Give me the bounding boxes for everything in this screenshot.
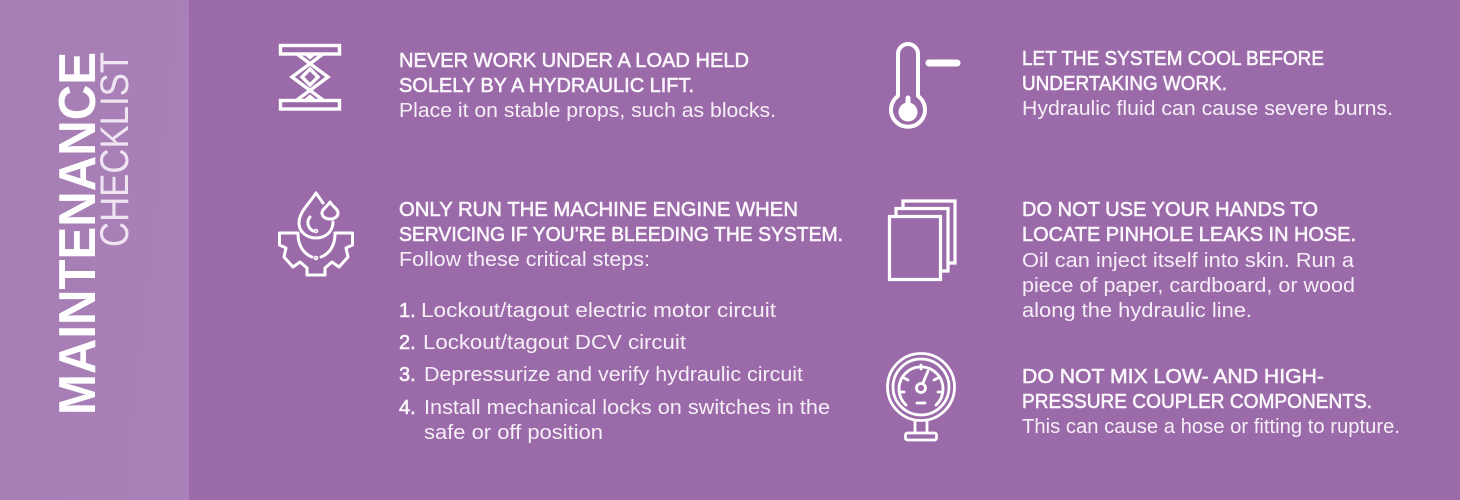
item: do not use hands: LOCATE PINHOLE LEAKS IN HOSE. bbox=[1022, 224, 1356, 246]
panel: sidebar bbox=[0, 0, 189, 500]
item: do not mix couplers: PRESSURE COUPLER COMPONENTS. bbox=[1022, 391, 1372, 413]
numbered list: 2. bbox=[399, 332, 416, 354]
numbered list: 4. bbox=[399, 397, 416, 419]
icon: paper sheets bbox=[890, 201, 955, 280]
item: only run the engine: SERVICING IF YOU’RE BLEEDING THE SYSTEM. bbox=[399, 224, 843, 246]
icon: thermometer bbox=[891, 44, 957, 127]
numbered list: 1. bbox=[399, 300, 416, 322]
item: let the system cool: UNDERTAKING WORK. bbox=[1022, 73, 1227, 95]
icon: pressure gauge bbox=[888, 354, 954, 440]
numbered list bbox=[399, 300, 830, 444]
item: only run the engine bbox=[280, 193, 843, 444]
numbered list: Lockout/tagout electric motor circuit bbox=[421, 300, 776, 322]
icon: oil drop and gear bbox=[280, 193, 352, 275]
subtitle: checklist: CHECKLIST bbox=[93, 52, 137, 247]
item: do not use hands: Oil can inject itself into skin. Run a bbox=[1022, 250, 1355, 272]
item: do not use hands: along the hydraulic line. bbox=[1022, 300, 1252, 322]
numbered list: Install mechanical locks on switches in the bbox=[424, 397, 830, 419]
item: do not mix couplers: This can cause a hose or fitting to rupture. bbox=[1022, 416, 1400, 438]
item: only run the engine: Follow these critical steps: bbox=[399, 249, 650, 271]
text: couplers heading: DO NOT MIX LOW- AND HIGH- bbox=[1022, 366, 1324, 388]
item: let the system cool bbox=[891, 44, 1393, 127]
numbered list: safe or off position bbox=[424, 422, 603, 444]
item: never work under a load bbox=[280, 46, 776, 122]
item: let the system cool: Hydraulic fluid can cause severe burns. bbox=[1022, 98, 1393, 120]
numbered list: 3. bbox=[399, 364, 416, 386]
text: hands heading: DO NOT USE YOUR HANDS TO bbox=[1022, 199, 1318, 221]
numbered list: Lockout/tagout DCV circuit bbox=[423, 332, 686, 354]
icon: hourglass props bbox=[280, 46, 340, 109]
text: cool heading: LET THE SYSTEM COOL BEFORE bbox=[1022, 48, 1324, 70]
text: only run heading: ONLY RUN THE MACHINE ENGINE WHEN bbox=[399, 199, 798, 221]
item: do not use hands bbox=[890, 199, 1356, 322]
title: maintenance: MAINTENANCE bbox=[49, 52, 107, 415]
numbered list: Depressurize and verify hydraulic circuit bbox=[424, 364, 803, 386]
item: never work under a load: SOLELY BY A HYDRAULIC LIFT. bbox=[399, 75, 694, 97]
text: never work heading: NEVER WORK UNDER A LOAD HELD bbox=[399, 50, 749, 72]
item: never work under a load: Place it on stable props, such as blocks. bbox=[399, 100, 776, 122]
item: do not use hands: piece of paper, cardboard, or wood bbox=[1022, 275, 1355, 297]
item: do not mix couplers bbox=[888, 354, 1400, 440]
